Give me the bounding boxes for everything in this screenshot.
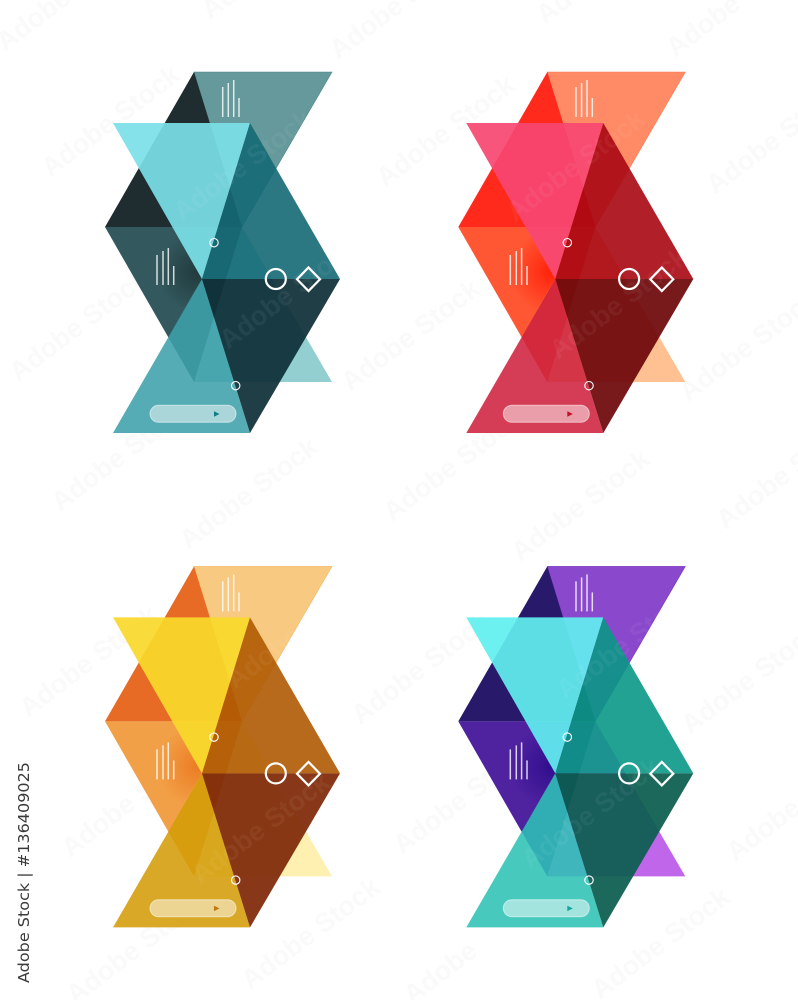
lower right small triangle: [547, 227, 685, 382]
icon: top bars: [223, 574, 239, 611]
upper light triangle: [113, 123, 250, 279]
icon: small circle lower: [232, 876, 240, 884]
icon: left bars: [157, 248, 174, 285]
icon: diamond: [650, 268, 673, 291]
icon: top bars: [576, 80, 592, 117]
diamond lower half: [555, 773, 693, 927]
upper left dark triangle: [105, 566, 242, 721]
diamond lower half: [202, 279, 340, 433]
icon: left bars: [157, 742, 174, 779]
button pill: [503, 405, 589, 422]
watermark overlay on shapes: Adobe Stock: [168, 103, 318, 227]
watermark pattern on background: Adobe Stock: [4, 263, 154, 387]
top inverted triangle: [547, 72, 685, 227]
icon: diamond: [297, 268, 320, 291]
lower left triangle: [458, 227, 595, 382]
top inverted triangle: [194, 72, 332, 227]
watermark pattern on background: Adobe Stock: [336, 273, 486, 397]
icon: small circle lower: [232, 382, 240, 390]
top inverted triangle: [194, 566, 332, 721]
watermark pattern on background: Adobe Stock: [378, 403, 528, 527]
icon: diamond: [297, 762, 320, 785]
upper left dark triangle: [105, 72, 242, 227]
watermark pattern on background: Adobe Stock: [56, 739, 206, 863]
lower left triangle: [458, 721, 595, 876]
diamond lower half: [555, 279, 693, 433]
lower triangle: [466, 279, 603, 433]
panel: red arrow banner: [458, 72, 693, 433]
button pill: [150, 405, 236, 422]
icon: large circle: [619, 269, 639, 289]
icon: left bars: [510, 248, 527, 285]
watermark pattern on background: Adobe Stock: [506, 443, 656, 567]
watermark pattern on background: Adobe Stock: [346, 606, 496, 730]
watermark overlay on shapes: Adobe Stock: [221, 571, 371, 695]
icon: small circle upper: [563, 733, 572, 741]
watermark overlay on shapes: [168, 103, 701, 890]
watermark pattern on background: Adobe Stock: [36, 59, 186, 183]
watermark pattern on background: Adobe Stock: [14, 599, 164, 723]
panel: purple and green arrow banner: [458, 566, 693, 927]
lower right small triangle: [194, 721, 332, 876]
shadow near centre: [458, 168, 555, 335]
watermark overlay on shapes: Adobe Stock: [551, 581, 701, 705]
upper light triangle: [466, 123, 603, 279]
watermark pattern on background: Adobe Stock: [236, 871, 386, 995]
watermark overlay on shapes: Adobe Stock: [516, 751, 666, 875]
watermark pattern on background: Adobe Stock: [46, 393, 196, 517]
top inverted triangle: [547, 566, 685, 721]
lower right small triangle: [547, 721, 685, 876]
watermark pattern on background: Adobe Stock: [371, 69, 521, 193]
icon: small circle upper: [210, 733, 218, 741]
panel: yellow arrow banner: [105, 566, 340, 927]
icon: large circle: [619, 763, 639, 783]
upper light triangle: [466, 617, 603, 773]
icon: diamond: [650, 762, 673, 785]
watermark pattern on background: Adobe Stock: [174, 431, 324, 555]
lower right small triangle: [194, 227, 332, 382]
button pill: [503, 900, 589, 917]
shadow near centre: [105, 662, 202, 829]
icon: top bars: [223, 80, 239, 117]
upper left dark triangle: [458, 72, 595, 227]
upper left dark triangle: [458, 566, 595, 721]
icon: small circle upper: [563, 238, 572, 247]
lower triangle: [466, 773, 603, 927]
diamond lower half: [202, 773, 340, 927]
upper light triangle: [113, 617, 250, 773]
button pill: [150, 900, 236, 917]
diamond upper half: [202, 123, 340, 279]
lower triangle: [113, 773, 250, 927]
icon: large circle: [266, 269, 286, 289]
diamond upper half: [555, 617, 693, 773]
icon: small circle upper: [210, 238, 218, 247]
icon: left bars: [510, 742, 527, 779]
icon: top bars: [576, 574, 592, 611]
lower left triangle: [105, 227, 242, 382]
watermark overlay on shapes: Adobe Stock: [544, 241, 694, 365]
icon: small circle lower: [585, 382, 593, 390]
watermark pattern on background: Adobe Stock: [388, 736, 538, 860]
watermark overlay on shapes: Adobe Stock: [186, 766, 336, 890]
diamond upper half: [202, 617, 340, 773]
lower left triangle: [105, 721, 242, 876]
diamond upper half: [555, 123, 693, 279]
shadow near centre: [458, 662, 555, 829]
watermark overlay on shapes: Adobe Stock: [501, 103, 651, 227]
icon: large circle: [266, 763, 286, 783]
lower triangle: [113, 279, 250, 433]
stock id credit text: Adobe Stock | #136409025: [15, 762, 33, 983]
shadow near centre: [105, 168, 202, 335]
panel: teal arrow banner: [105, 72, 340, 433]
watermark overlay on shapes: Adobe Stock: [214, 231, 364, 355]
icon: small circle lower: [585, 876, 593, 884]
